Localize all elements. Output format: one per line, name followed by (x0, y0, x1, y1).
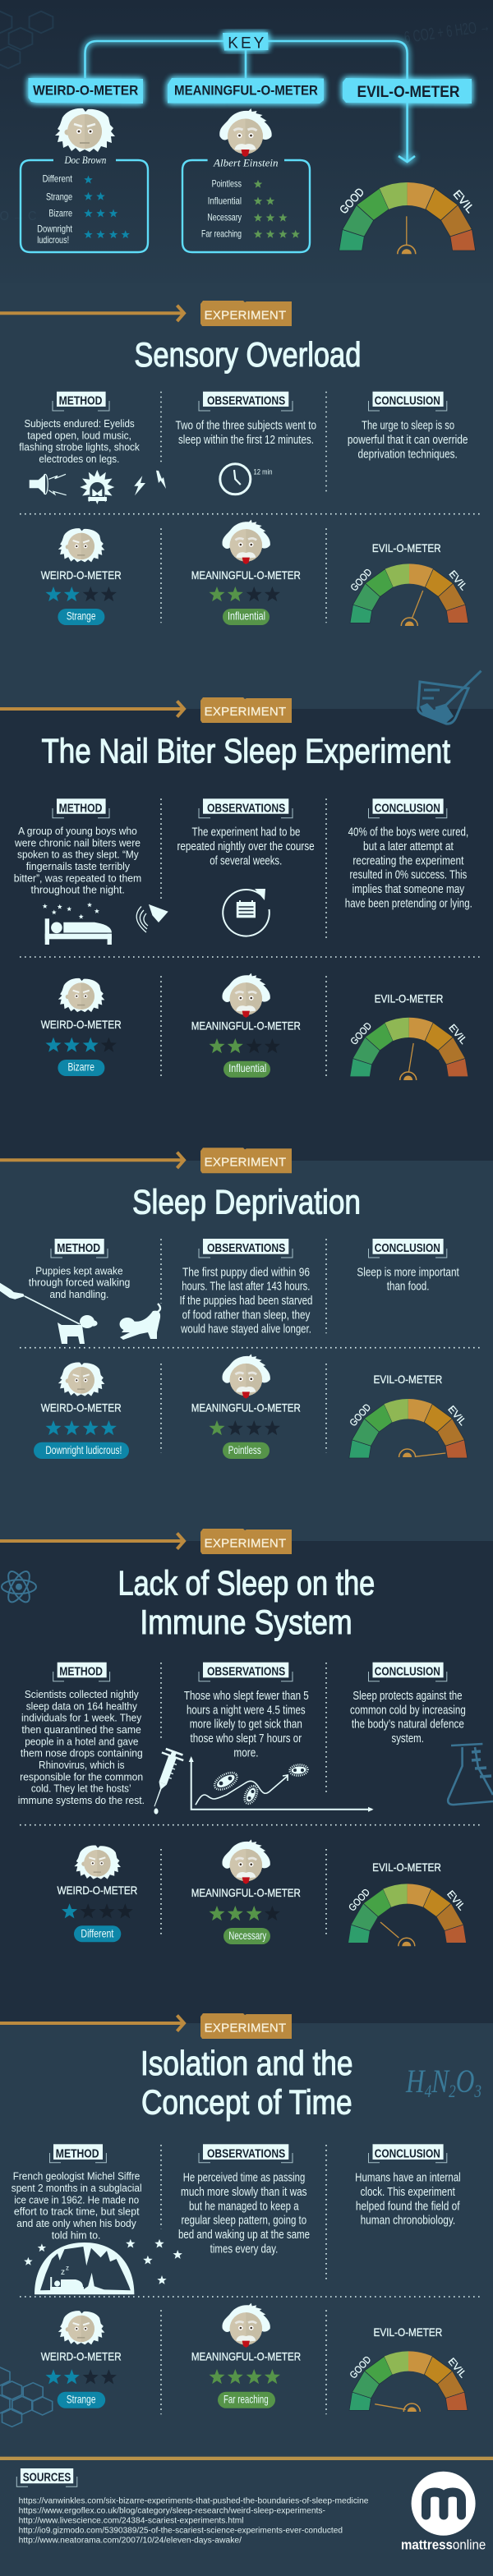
method text (12, 2171, 142, 2241)
method heading (49, 2144, 106, 2163)
conclusion heading (368, 2144, 447, 2163)
method text: ice cave in 1962. He made no (14, 2194, 139, 2206)
doc brown rating (41, 2311, 122, 2408)
icon: clock (220, 464, 251, 494)
weird-o-meter legend box: Strange (46, 191, 72, 202)
icon: doc brown (55, 108, 115, 152)
doc brown rating: WEIRD-O-METER (41, 1018, 122, 1031)
background: immune system band (0, 1541, 493, 2023)
section 3: sleep deprivation (0, 1148, 481, 1459)
method text: people in a hotel and gave (25, 1736, 138, 1747)
method heading (53, 392, 109, 411)
experiment badge (200, 301, 292, 326)
einstein rating: MEANINGFUL-O-METER (191, 1401, 301, 1414)
observations heading (199, 1663, 293, 1681)
weird-o-meter legend box: Bizarre (48, 207, 72, 218)
method text (18, 1689, 145, 1806)
section 2: nail biter (0, 697, 481, 1080)
observations heading: OBSERVATIONS (207, 1666, 286, 1679)
icon: ice cave with sleeper (35, 2242, 134, 2294)
doc brown rating (41, 528, 122, 625)
doc brown rating: Strange (67, 2393, 96, 2406)
evil-o-meter gauge: EVIL (447, 568, 470, 592)
conclusion text: deprivation techniques. (358, 447, 458, 461)
observations text: times every day. (210, 2242, 278, 2256)
icon: speaker with sound waves (136, 905, 168, 932)
conclusion text (348, 419, 468, 461)
einstein rating: Influential (228, 609, 265, 622)
evil-o-meter label (343, 78, 472, 104)
method heading (53, 1663, 110, 1681)
icon: ice cave with sleeper: z (61, 2268, 65, 2277)
background: nail biter band (0, 709, 493, 1161)
observations text: sleep within the first 12 minutes. (178, 433, 314, 447)
title: Isolation and the (141, 2044, 352, 2082)
conclusion text: Sleep protects against the (352, 1689, 463, 1703)
observations text: much more slowly than it was (181, 2185, 307, 2199)
decoration: key hexagons and formula: O → C (0, 209, 36, 223)
weird-o-meter legend box: ludicrous! (37, 234, 69, 246)
method text: sleep data on 164 healthy (26, 1700, 138, 1712)
evil gauge key: EVIL (451, 187, 477, 215)
method heading: METHOD (57, 1242, 100, 1255)
observations text (177, 826, 315, 867)
method text: flashing strobe lights, shock (19, 442, 141, 453)
conclusion text: but a later attempt at (363, 840, 454, 853)
method text: individuals for 1 week. They (21, 1713, 142, 1724)
sources list: http://www.neatorama.com/2007/10/24/eleven-days-awake/ (19, 2536, 242, 2545)
section 4: immune system (0, 1529, 493, 1946)
section 5: isolation (0, 2013, 481, 2426)
method heading: METHOD (59, 802, 102, 815)
icon: sickness chart with bacteria (189, 1756, 374, 1812)
decoration: handwritten formula: 2 (449, 2081, 456, 2101)
evil-o-meter gauge: EVIL (445, 1403, 469, 1428)
method text: fingernails taste terribly (26, 861, 131, 872)
method text: and ate only when his body (16, 2218, 136, 2229)
header arrow (0, 701, 184, 717)
evil-o-meter gauge: EVIL-O-METER (373, 2325, 442, 2339)
observations heading: OBSERVATIONS (207, 1242, 286, 1255)
evil-o-meter gauge: EVIL-O-METER (372, 1861, 441, 1874)
title: Lack of Sleep on the (118, 1564, 375, 1603)
observations text: The experiment had to be (192, 826, 301, 840)
method heading: METHOD (56, 2147, 99, 2160)
conclusion heading (368, 392, 447, 411)
weird-o-meter label (28, 78, 143, 104)
method heading (53, 798, 109, 818)
observations heading (199, 392, 293, 411)
icon: ice cave with sleeper: z (66, 2264, 69, 2272)
evil-o-meter gauge: GOOD (348, 1020, 374, 1047)
header arrow (0, 2015, 184, 2031)
observations heading: OBSERVATIONS (207, 394, 286, 407)
method text: bitter”, was repeated to them (14, 872, 141, 884)
key label: KEY (228, 34, 265, 52)
header arrow (0, 1152, 184, 1168)
header arrow (0, 1533, 184, 1549)
icon: flask decoration (448, 1744, 493, 1805)
experiment badge: EXPERIMENT (205, 1155, 286, 1169)
einstein rating: Necessary (228, 1929, 266, 1942)
evil-o-meter gauge: GOOD (348, 566, 375, 593)
doc brown rating (57, 1845, 137, 1942)
doc brown rating: Bizarre (67, 1060, 94, 1073)
sources list: http://io9.gizmodo.com/5390389/25-of-the-scariest-science-experiments-ever-conducted (19, 2526, 343, 2535)
method text: were chronic nail biters were (14, 837, 141, 849)
conclusion heading: CONCLUSION (375, 1666, 440, 1679)
icon: hand holding leash and dog (0, 1283, 98, 1344)
icon: playful dog (120, 1304, 160, 1340)
meaningful-o-meter legend box: Pointless (212, 177, 242, 189)
clock label: 12 min (253, 467, 273, 476)
method text: taped open, loud music, (27, 430, 131, 441)
evil-o-meter gauge: GOOD (348, 1401, 373, 1428)
einstein rating (191, 1839, 301, 1944)
section 1: sensory overload (0, 301, 481, 626)
conclusion heading (368, 798, 447, 818)
icon: albert einstein (219, 108, 272, 157)
sources list: https://vanwinkles.com/six-bizarre-experiments-that-pushed-the-boundaries-of-sleep-medicine (19, 2496, 369, 2505)
conclusion heading: CONCLUSION (375, 1242, 440, 1255)
evil-o-meter gauge: EVIL (445, 1888, 468, 1912)
experiment badge (200, 697, 292, 723)
method heading: METHOD (59, 1666, 103, 1679)
weird-o-meter legend box (21, 160, 148, 252)
evil-o-meter gauge: EVIL-O-METER (373, 1373, 442, 1386)
method text: then quarantined the same (21, 1724, 141, 1736)
weird-o-meter label: WEIRD-O-METER (33, 82, 138, 98)
einstein rating: MEANINGFUL-O-METER (191, 1886, 301, 1899)
method text: them nose drops containing (21, 1748, 143, 1760)
observations text: hours a night were 4.5 times (187, 1703, 306, 1717)
observations text: If the puppies had been starved (180, 1294, 312, 1308)
meaningful-o-meter label: MEANINGFUL-O-METER (174, 82, 318, 98)
conclusion text: recreating the experiment (352, 853, 464, 867)
decoration: hexagons (0, 2367, 53, 2426)
observations text: of several weeks. (210, 853, 282, 867)
einstein rating: MEANINGFUL-O-METER (191, 2349, 301, 2362)
observations heading (199, 1239, 293, 1258)
observations text: He perceived time as passing (183, 2171, 305, 2185)
sources list: http://www.livescience.com/24384-scariest-experiments.html (19, 2516, 244, 2525)
doc brown rating: WEIRD-O-METER (41, 2349, 122, 2362)
observations heading: OBSERVATIONS (207, 802, 286, 815)
conclusion text (350, 1689, 466, 1746)
meaningful-o-meter label (168, 78, 324, 104)
method heading: METHOD (59, 394, 102, 407)
evil-o-meter gauge (348, 2325, 469, 2412)
evil-o-meter gauge (346, 1861, 468, 1946)
meaningful-o-meter legend box: Far reaching (201, 228, 242, 239)
method text: responsible for the common (20, 1771, 143, 1782)
method text: told him to. (52, 2229, 100, 2241)
conclusion text (357, 1265, 459, 1294)
observations text: Those who slept fewer than 5 (184, 1689, 309, 1703)
key connector lines and arrow (85, 41, 415, 162)
conclusion text: the body’s natural defence (352, 1718, 464, 1732)
method text: French geologist Michel Siffre (13, 2171, 140, 2183)
evil-o-meter gauge (348, 992, 470, 1080)
einstein rating: Influential (228, 1061, 266, 1074)
evil gauge key: GOOD (337, 185, 366, 216)
observations text: more. (233, 1746, 259, 1760)
method text: Subjects endured: Eyelids (24, 418, 135, 430)
einstein rating (191, 973, 301, 1078)
experiment badge: EXPERIMENT (205, 308, 286, 322)
doc brown rating: Different (81, 1926, 113, 1939)
observations text: regular sleep pattern, going to (181, 2214, 306, 2228)
conclusion text: human chronobiology. (361, 2214, 455, 2228)
icon: repeating calendar (223, 889, 270, 936)
method text: cold. They let the hosts’ (31, 1783, 131, 1795)
title: Sensory Overload (134, 335, 361, 374)
observations text: The first puppy died within 96 (182, 1265, 310, 1279)
conclusion text: Humans have an internal (355, 2171, 461, 2185)
einstein rating: MEANINGFUL-O-METER (191, 1019, 301, 1032)
observations text: but he managed to keep a (189, 2199, 299, 2213)
meaningful-o-meter legend box: Influential (208, 196, 242, 207)
conclusion heading: CONCLUSION (375, 802, 440, 815)
observations text: more likely to get sick than (190, 1718, 302, 1732)
icon: strobe light (80, 470, 114, 504)
doc brown rating (41, 978, 122, 1076)
albert einstein name: Albert Einstein (213, 157, 279, 169)
decoration: handwritten formula: O (456, 2063, 474, 2100)
evil-o-meter gauge (348, 541, 470, 626)
method text: A group of young boys who (18, 826, 137, 837)
icon: atom decoration (2, 1568, 36, 1605)
meaningful-o-meter legend box (182, 160, 310, 252)
background: sensory overload band (0, 283, 493, 709)
sources heading (16, 2468, 77, 2486)
decoration: handwritten formula: 4 (425, 2081, 431, 2101)
evil-o-meter gauge: EVIL (446, 2356, 469, 2380)
icon: sleeper in bed (45, 918, 112, 945)
method text: through forced walking (29, 1277, 130, 1289)
key label (223, 33, 268, 52)
mattressonline logo (401, 2472, 486, 2552)
icon: moon and stars (20, 2239, 182, 2284)
observations text: hours. The last after 143 hours. (182, 1280, 310, 1294)
evil gauge key (337, 182, 477, 254)
conclusion heading: CONCLUSION (375, 2147, 440, 2160)
decoration: key hexagons and formula (0, 12, 491, 223)
method text (19, 418, 141, 465)
evil-o-meter label: EVIL-O-METER (357, 84, 460, 101)
method text: Puppies kept awake (35, 1265, 123, 1276)
observations heading: OBSERVATIONS (207, 2147, 286, 2160)
doc brown rating: Strange (67, 609, 96, 622)
header arrow (0, 306, 184, 321)
experiment badge (200, 2013, 292, 2039)
sources heading: SOURCES (23, 2472, 71, 2485)
key panel (21, 33, 477, 254)
experiment badge: EXPERIMENT (205, 705, 286, 719)
experiment badge (200, 1529, 292, 1554)
doc brown rating: WEIRD-O-METER (57, 1884, 137, 1897)
icon: syringe (144, 1747, 186, 1815)
evil-o-meter gauge: EVIL (446, 1022, 470, 1046)
observations text: of food rather than sleep, they (182, 1308, 311, 1322)
evil-o-meter gauge: EVIL-O-METER (372, 541, 441, 554)
observations text: repeated nightly over the course (177, 840, 315, 853)
evil-o-meter gauge (348, 1373, 469, 1458)
method text: effort to track time, but slept (14, 2206, 140, 2218)
observations text: would have stayed alive longer. (180, 1322, 311, 1336)
conclusion heading (368, 1663, 447, 1681)
icon: loudspeaker (30, 474, 67, 495)
observations text: Two of the three subjects went to (176, 419, 316, 433)
method text: spent 2 months in a subglacial (12, 2183, 142, 2194)
weird-o-meter legend box: Downright (37, 223, 73, 235)
background: key band (0, 0, 493, 283)
einstein rating: Pointless (228, 1443, 261, 1456)
observations text (178, 2171, 310, 2256)
experiment badge: EXPERIMENT (205, 1536, 286, 1550)
meaningful-o-meter legend box: Necessary (207, 211, 242, 223)
method text: spoken to as they slept. “My (17, 849, 139, 861)
background: isolation band (0, 2023, 493, 2576)
sources list: https://www.ergoflex.co.uk/blog/category/sleep-research/weird-sleep-experiments- (19, 2506, 325, 2515)
mattressonline logo: mattressonline (401, 2537, 486, 2552)
observations text: those who slept 7 hours or (191, 1732, 302, 1746)
einstein rating (191, 1354, 301, 1459)
doc brown rating: WEIRD-O-METER (41, 568, 122, 582)
einstein rating (191, 520, 301, 625)
evil-o-meter gauge: GOOD (346, 1886, 372, 1913)
conclusion heading (368, 1239, 447, 1258)
conclusion text: helped found the field of (356, 2199, 460, 2213)
conclusion text: The urge to sleep is so (362, 419, 454, 433)
doc brown name: Doc Brown (64, 154, 106, 166)
method text (29, 1265, 130, 1300)
method text: electrodes on legs. (39, 453, 119, 465)
observations heading (199, 798, 293, 818)
experiment badge (200, 1148, 292, 1173)
observations text (176, 419, 316, 447)
doc brown rating (34, 1362, 129, 1459)
method text: and handling. (49, 1289, 108, 1300)
gold divider bar (0, 2457, 493, 2460)
method text (14, 826, 141, 896)
observations text: bed and waking up at the same (178, 2228, 310, 2242)
evil-o-meter gauge: GOOD (348, 2353, 374, 2380)
observations text (180, 1265, 312, 1336)
title: Immune System (140, 1603, 352, 1641)
method text: immune systems do the rest. (18, 1795, 145, 1806)
decoration: handwritten formula: 3 (474, 2081, 481, 2101)
background: sleep deprivation band (0, 1161, 493, 1541)
weird-o-meter legend box: Different (43, 173, 73, 185)
experiment badge: EXPERIMENT (205, 2021, 286, 2035)
evil-o-meter gauge: EVIL-O-METER (375, 992, 443, 1005)
icon: lightning bolts (134, 471, 166, 495)
conclusion text: system. (391, 1732, 424, 1746)
conclusion text: Sleep is more important (357, 1265, 459, 1279)
conclusion heading: CONCLUSION (375, 394, 440, 407)
conclusion text: clock. This experiment (361, 2185, 455, 2199)
einstein rating: MEANINGFUL-O-METER (191, 568, 301, 582)
einstein rating (191, 2303, 301, 2408)
conclusion text: implies that someone may (352, 882, 465, 896)
decoration: handwritten formula: N (431, 2063, 450, 2100)
method text: Rhinovirus, which is (39, 1760, 125, 1771)
method text: Scientists collected nightly (25, 1689, 139, 1700)
title: Concept of Time (141, 2082, 352, 2121)
sources list (19, 2496, 369, 2545)
title (141, 2044, 352, 2121)
icon: moon and stars (24, 899, 99, 919)
doc brown rating: WEIRD-O-METER (41, 1401, 122, 1414)
method heading (51, 1239, 108, 1258)
observations text (184, 1689, 309, 1760)
method text: throughout the night. (31, 885, 125, 896)
conclusion text (345, 826, 472, 910)
decoration: handwritten formula: H (406, 2063, 430, 2100)
title: Sleep Deprivation (132, 1182, 361, 1221)
conclusion text (355, 2171, 461, 2228)
doc brown rating: Downright ludicrous! (45, 1443, 122, 1456)
conclusion text: than food. (387, 1280, 429, 1294)
title (118, 1564, 375, 1641)
decoration: clipboard and pencil (418, 671, 481, 724)
observations heading (199, 2144, 293, 2163)
einstein rating: Far reaching (223, 2393, 269, 2406)
